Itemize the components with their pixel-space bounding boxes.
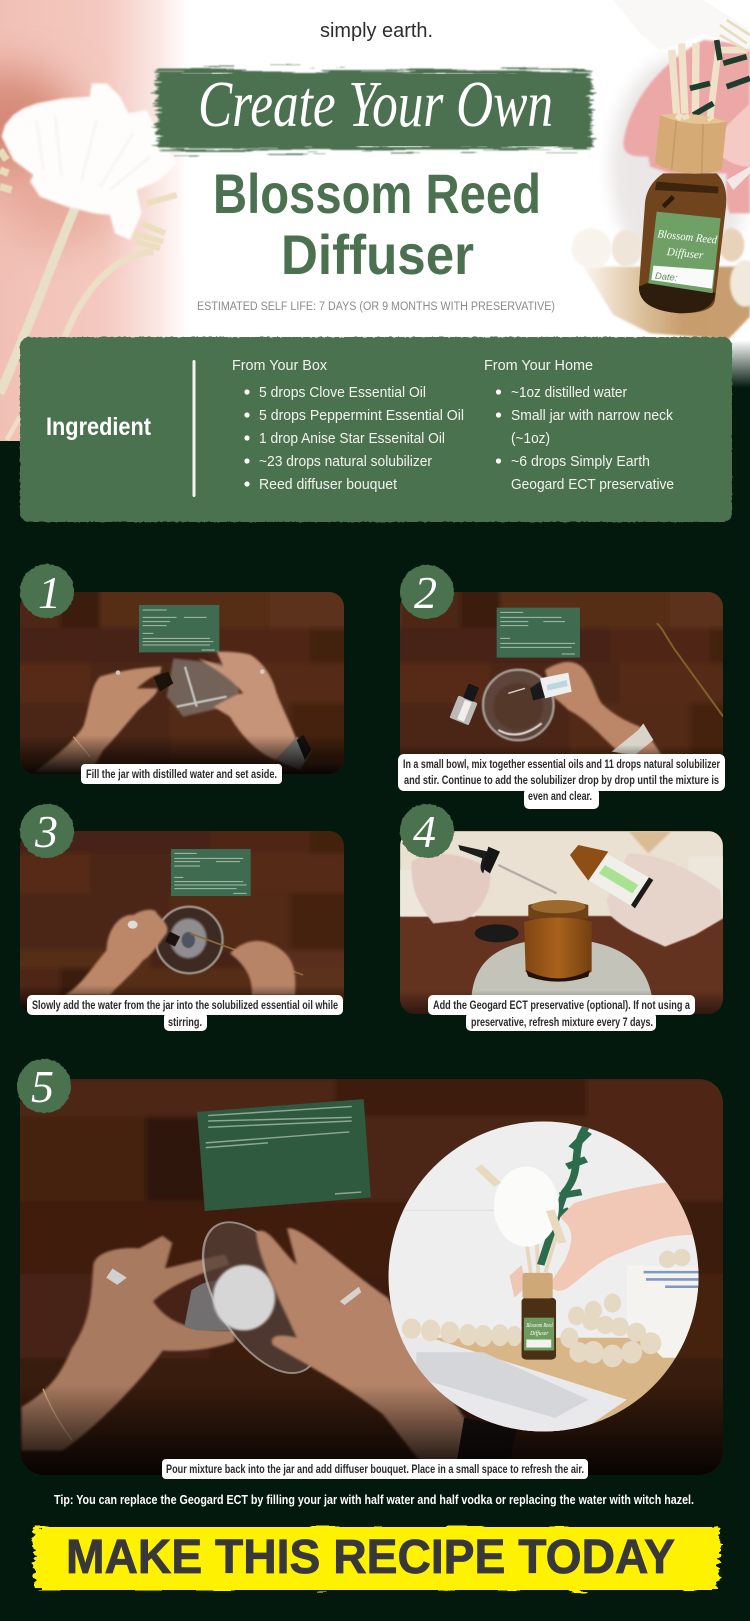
ingredient label: Ingredient (46, 413, 152, 441)
column: from your home: (~1oz) (511, 430, 550, 447)
script title: Create Your Own (198, 68, 553, 141)
bottle photo right (572, 0, 750, 339)
main heading: Diffuser (281, 223, 474, 286)
corner cut (703, 0, 750, 30)
call to action banner (34, 1527, 719, 1590)
bamboo cap (655, 113, 727, 174)
caption: Pour mixture back into the jar and add diffuser bouquet. Place in a small space to refresh the air. (166, 1464, 584, 1476)
column: from your box: 5 drops Clove Essential Oil (259, 384, 426, 401)
photo: mixing oils (400, 592, 723, 756)
photo: adding water (20, 831, 344, 1012)
number badge: 5 (31, 1061, 54, 1112)
divider (192, 360, 196, 497)
number badge (400, 565, 454, 619)
bottle label (648, 212, 721, 293)
bottle label: Blossom Reed (657, 228, 718, 247)
bottle label: Diffuser (665, 246, 704, 262)
number badge (17, 1059, 71, 1113)
inset circle photo (388, 1121, 703, 1436)
column: from your box: Reed diffuser bouquet (259, 476, 398, 493)
inset circle photo: Blossom Reed (526, 1321, 553, 1329)
cta text: MAKE THIS RECIPE TODAY (66, 1531, 675, 1584)
column: from your home: Geogard ECT preservative (511, 476, 674, 493)
caption (81, 764, 282, 784)
number badge: 2 (414, 567, 437, 618)
column: from your home: Small jar with narrow neck (511, 407, 673, 424)
yellow brush (34, 1527, 719, 1590)
step 1 (14, 564, 350, 784)
caption: Slowly add the water from the jar into the solubilized essential oil while (32, 1000, 338, 1012)
step 2 (394, 565, 729, 809)
column: from your home (484, 357, 674, 493)
step 3 (14, 804, 350, 1031)
main heading (213, 162, 541, 286)
column: from your box (232, 357, 464, 493)
flower top (613, 0, 750, 50)
flower left (0, 83, 177, 440)
reeds (672, 43, 696, 115)
pink backdrop left (0, 0, 750, 448)
hand (623, 40, 750, 213)
header photo background (0, 0, 750, 448)
caption: preservative, refresh mixture every 7 days. (471, 1017, 653, 1029)
bottle label: Date: (655, 271, 678, 283)
column: from your box: 1 drop Anise Star Essenital Oil (259, 430, 445, 447)
column: from your box: ~23 drops natural solubilizer (259, 453, 432, 470)
number badge (20, 804, 74, 858)
caption (428, 995, 695, 1031)
photo: filling the jar (14, 586, 350, 780)
shelf life note: ESTIMATED SELF LIFE: 7 DAYS (OR 9 MONTHS WITH PRESERVATIVE) (197, 301, 555, 313)
column: from your home: From Your Home (484, 357, 593, 374)
panel background (20, 337, 732, 522)
logo: simply earth. (320, 20, 433, 42)
caption: Fill the jar with distilled water and set aside. (86, 769, 277, 781)
caption (162, 1459, 588, 1479)
photo: pouring mixture (14, 1073, 729, 1481)
column: from your home: ~6 drops Simply Earth (511, 453, 650, 470)
number badge: 4 (413, 806, 436, 857)
brush banner with script title (157, 68, 591, 150)
number badge: 3 (34, 806, 58, 857)
number badge (400, 804, 454, 858)
number badge (20, 564, 74, 618)
brush stroke (157, 70, 591, 150)
inset circle photo: Diffuser (529, 1329, 548, 1337)
caption: Add the Geogard ECT preservative (optional). If not using a (433, 1000, 690, 1012)
caption: even and clear. (528, 791, 592, 803)
step 4 (400, 804, 723, 1031)
caption: stirring. (168, 1017, 202, 1029)
column: from your box: From Your Box (232, 357, 327, 374)
column: from your home: ~1oz distilled water (511, 384, 627, 401)
step 5 (14, 1059, 729, 1481)
column: from your box: 5 drops Peppermint Essential Oil (259, 407, 464, 424)
caption (27, 995, 343, 1031)
panel: ingredients (20, 337, 732, 522)
caption (398, 754, 725, 809)
main heading: Blossom Reed (213, 162, 541, 225)
amber bottle (639, 173, 726, 313)
photo: adding preservative (400, 831, 723, 1017)
number badge: 1 (38, 567, 61, 618)
